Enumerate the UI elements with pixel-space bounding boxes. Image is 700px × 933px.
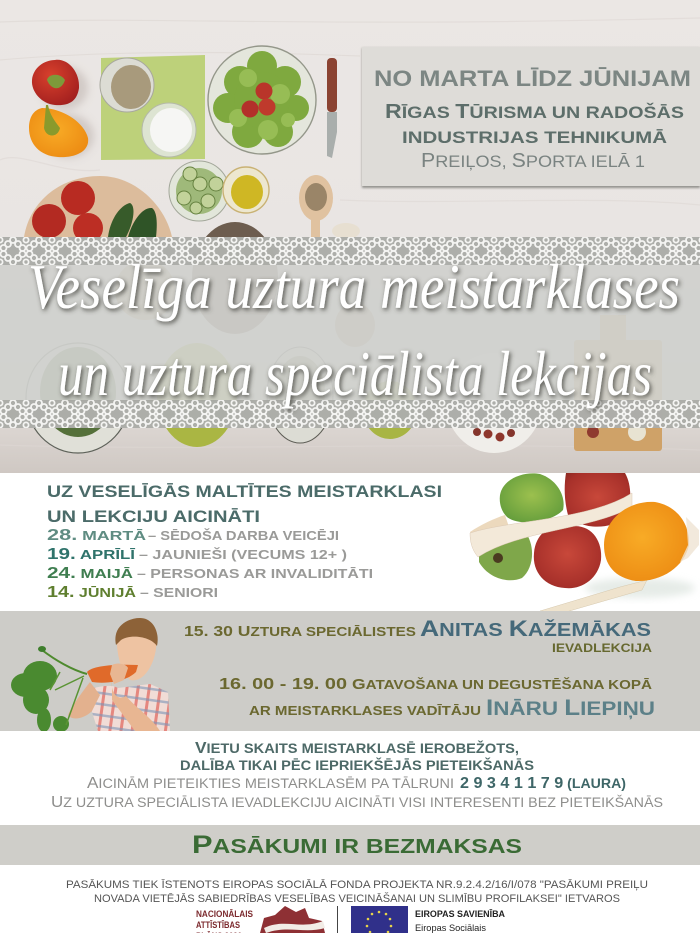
text: cooking time: 16. 00 - 19. 00 (219, 676, 347, 693)
divider (337, 906, 338, 933)
icon: cucumber bowl (169, 161, 229, 221)
logo: national development plan: NACIONĀLAIS (196, 909, 253, 920)
text: pre-registration: DALĪBA TIKAI PĒC IEPRIEKŠĒJĀS PIETEIKŠANĀS (180, 758, 534, 773)
icon: yellow pepper (29, 105, 94, 158)
icon: green napkin (101, 55, 205, 160)
list item: 19 April: – JAUNIEŠI (VECUMS 12+ ) (139, 547, 347, 562)
text: call to register: AICINĀM PIETEIKTIES MEISTARKLASĒM PA TĀLRUNI (87, 775, 454, 792)
panel: free of charge band (0, 825, 700, 865)
list item: 28 March (47, 527, 339, 544)
logo: national development plan: ATTĪSTĪBAS (196, 920, 240, 931)
logo: EU flag (351, 906, 408, 933)
icon: small green dish (363, 381, 417, 439)
text: lecture time: 15. 30 U ZTURA SPECIĀLISTES (184, 623, 416, 640)
icon: salad bowl (208, 46, 316, 154)
panel: invitation dates (0, 473, 700, 616)
food photo: vegetables and bowls (24, 46, 662, 453)
icon: white plate with tomatoes (446, 353, 542, 453)
text: intro lecture: IEVADLEKCIJA (552, 643, 652, 655)
text: project note line 2: NOVADA VIETĒJĀS SABIEDRĪBAS VESELĪBAS VEICINĀŠANAI UN SLIMĪBU PROFILAKSEI" IETVAROS (94, 892, 620, 905)
text: venue line 1: RĪGAS TŪRISMA UN RADOŠĀS (385, 101, 684, 123)
list item: 28 March: – SĒDOŠA DARBA VEICĒJI (148, 528, 339, 543)
text: cooking description: GATAVOŠANA UN DEGUSTĒŠANA KOPĀ (352, 676, 653, 693)
list item: 14 June (47, 584, 218, 601)
icon: cutting board with tomatoes (24, 176, 172, 243)
panel: registration info (0, 731, 700, 825)
heading: period: NO MARTA LĪDZ JŪNIJAM (374, 66, 691, 91)
list item: 24 May: 24. MAIJĀ (47, 565, 134, 582)
text: lecturer name: ANITAS KAŽEMĀKAS (420, 616, 651, 641)
icon: olive oil bowl (223, 167, 269, 213)
list item: 24 May: – PERSONAS AR INVALIDITĀTI (137, 566, 373, 581)
icon: dark bowl behind banner (192, 222, 278, 334)
text: phone number: 2 9 3 4 1 1 7 9 (LAURA) (460, 775, 626, 792)
icon: lower glass bowl (267, 347, 333, 443)
text: venue line 2: INDUSTRIJAS TEHNIKUMĀ (402, 128, 667, 147)
list item: 14 June: – SENIORI (140, 585, 218, 600)
heading: invitation line 2: UN LEKCIJU AICINĀTI (47, 507, 260, 526)
icon: plate behind banner (115, 260, 175, 320)
logo: national development plan (196, 906, 325, 933)
footer: funding note and logos (0, 865, 700, 933)
heading: events are free: PASĀKUMI IR BEZMAKSAS (192, 831, 522, 859)
text: workshop leader: AR MEISTARKLASES VADĪTĀJU (249, 703, 481, 718)
icon: garlic (332, 223, 360, 239)
icon: wooden cutting board (574, 315, 662, 451)
icon: green plate (157, 343, 237, 447)
heading: invitation line 1: UZ VESELĪGĀS MALTĪTES MEISTARKLASI (47, 482, 442, 501)
background: wooden table photo (0, 0, 700, 473)
icon: bowl of salt (142, 103, 196, 157)
icon: red bell pepper (32, 60, 88, 110)
icon: boy biting carrot (11, 618, 170, 732)
text: European Union: EIROPAS SAVIENĪBA (415, 909, 505, 920)
text: leader name: INĀRU LIEPIŅU (486, 695, 655, 720)
icon: knife (327, 58, 337, 158)
list item: 28 March: 28. MARTĀ (47, 527, 147, 544)
list item: 24 May (47, 565, 373, 582)
list item: 19 April: 19. APRĪLĪ (47, 546, 135, 563)
text: lecture open to all: UZ UZTURA SPECIĀLISTA IEVADLEKCIJU AICINĀTI VISI INTERESENTI BEZ PIETEIKŠANĀS (51, 794, 663, 811)
icon: bowl of seeds (100, 58, 154, 112)
list item: 19 April (47, 546, 347, 563)
icon: small spoon behind banner (335, 303, 375, 347)
icon: lower salad bowl (26, 343, 130, 453)
text: limited places: VIETU SKAITS MEISTARKLASĒ IEROBEŽOTS, (195, 740, 519, 757)
text: project note line 1: PASĀKUMS TIEK ĪSTENOTS EIROPAS SOCIĀLĀ FONDA PROJEKTA NR.9.2.4.2/16/I/078 "PASĀKUMI PREIĻU (66, 879, 648, 891)
list item: 14 June: 14. JŪNIJĀ (47, 584, 137, 601)
info panel: dates and place (362, 47, 700, 188)
text: address: PREIĻOS, SPORTA IELĀ 1 (421, 150, 645, 172)
icon: fruits with measuring tape (470, 473, 699, 616)
banner: title band with lace (0, 237, 700, 428)
icon: wooden spoon (299, 175, 333, 238)
panel: lecture schedule (0, 611, 700, 732)
